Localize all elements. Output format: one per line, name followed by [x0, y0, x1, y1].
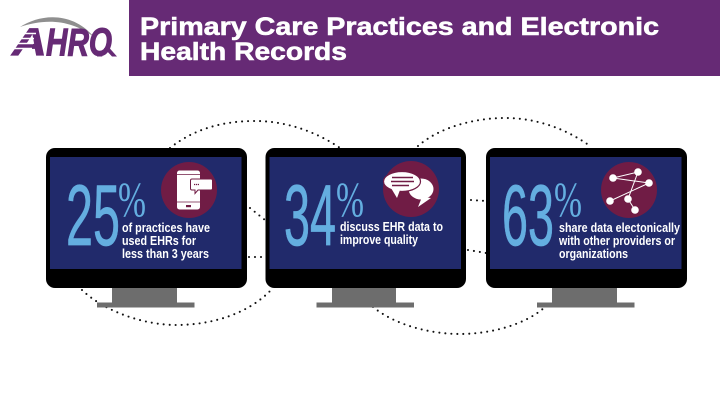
description 1 — [122, 220, 210, 261]
stat: percent sign: % — [118, 171, 146, 227]
bezel 2 — [266, 148, 466, 288]
stat: 25: 25 — [66, 168, 120, 264]
title banner: Health Records — [140, 39, 347, 66]
bezel 1 — [46, 148, 247, 288]
icon: smartphone with message — [161, 162, 217, 218]
monitor 3: 63% — [486, 148, 687, 308]
stat: 63: 63 — [502, 168, 554, 264]
description 2 — [340, 219, 443, 247]
screen 3 — [490, 157, 682, 269]
bezel 3 — [486, 148, 687, 288]
description 1: of practices have — [122, 220, 210, 235]
title banner — [129, 0, 720, 76]
stand 2 — [316, 288, 414, 308]
screen 1 — [50, 157, 242, 269]
screen 2 — [270, 157, 461, 269]
icon: network — [601, 162, 657, 218]
monitor 1: 25% — [46, 148, 247, 308]
description 2: discuss EHR data to — [340, 219, 443, 234]
logo: AHRQ: A — [11, 22, 47, 64]
stat: percent sign: % — [554, 171, 582, 227]
dotted connectors — [82, 118, 590, 334]
description 1: used EHRs for — [122, 233, 196, 248]
logo: AHRQ: HRQ — [46, 22, 112, 64]
title banner: Primary Care Practices and Electronic — [140, 14, 659, 41]
description 3: with other providers or — [558, 233, 675, 248]
stat: percent sign: % — [336, 171, 364, 227]
stand 1 — [97, 288, 194, 308]
stand 3 — [537, 288, 634, 308]
description 3: organizations — [559, 246, 628, 261]
logo: AHRQ — [11, 17, 120, 66]
icon: speech bubbles — [383, 161, 439, 217]
description 3: share data electonically — [559, 220, 681, 235]
description 2: improve quality — [340, 232, 419, 247]
stat: 34: 34 — [284, 168, 336, 264]
monitor 2: 34% — [266, 148, 466, 308]
description 1: less than 3 years — [122, 246, 209, 261]
description 3 — [558, 220, 681, 261]
